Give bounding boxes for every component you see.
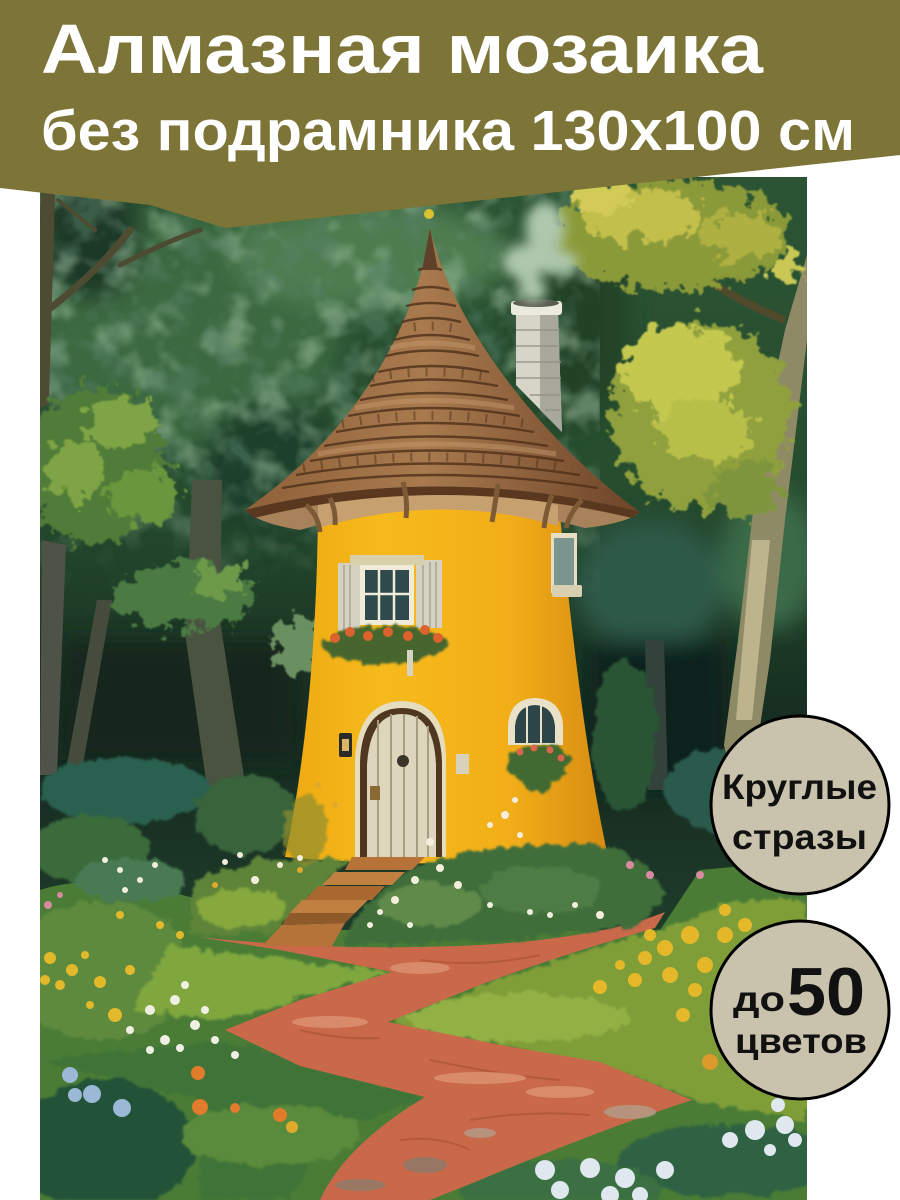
badge: round rhinestones [711,716,889,894]
chimney [511,299,562,432]
header banner [0,0,900,228]
left branches [42,197,200,400]
upper window with shutters [338,555,442,631]
forest background [40,177,807,930]
right meadow flowers [535,904,802,1200]
badge text: цветов [735,1022,867,1061]
flower box [322,625,448,676]
background tree trunks [40,480,668,795]
arched door [355,701,446,857]
badge text: Круглые [722,768,877,807]
badge text [733,954,867,1061]
roof brackets [306,482,582,532]
subtitle: без подрамника 130х100 см [41,99,855,163]
badge text: до [733,980,785,1019]
badge text [722,768,877,857]
flower beds by the house [44,782,704,945]
wooden steps [262,857,425,946]
lawn [10,860,840,1200]
house wall [285,495,607,863]
mid-ground shrubs [30,660,775,885]
eave underside [247,501,638,530]
winding brick path [198,912,692,1200]
path stones [292,962,656,1191]
left foliage [25,385,319,673]
left meadow flowers [40,911,298,1133]
painting: fairy-tale yellow house in forest [10,177,840,1200]
badge: up to 50 colours [711,921,889,1099]
right yellow-green foliage [550,177,799,518]
right tree trunk [708,255,807,753]
title: Алмазная мозаика [41,10,764,88]
conical shingle roof [245,209,640,530]
badge text: стразы [732,818,867,857]
badge text: 50 [787,954,865,1030]
hanging flower basket [506,743,570,792]
chimney smoke [503,202,578,302]
wall plaque [456,754,469,774]
lantern [339,733,352,757]
small arched window [508,698,563,745]
right narrow window [551,533,582,597]
